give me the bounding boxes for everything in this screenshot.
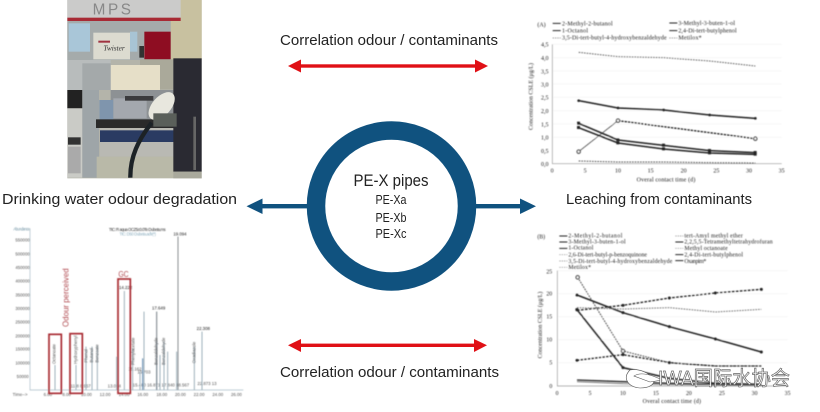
photo: lab instrument: Twister xyxy=(103,44,125,53)
chart: GC chromatogram: 18.00 xyxy=(156,392,168,397)
chart A: leaching concentrations: 4,5 xyxy=(541,43,548,49)
photo: lab instrument: MPS xyxy=(93,2,131,19)
chart: GC chromatogram: Butanol xyxy=(89,348,94,363)
chart A: leaching concentrations xyxy=(528,21,785,183)
chart: GC chromatogram: 50000 xyxy=(17,374,29,379)
chart B: overall contact time concentrations: 3,5-Di-tert-butyl-4-hydroxybenzaldehyde xyxy=(568,259,673,265)
chart: GC chromatogram: 20.00 xyxy=(175,392,186,397)
chart B: overall contact time concentrations xyxy=(537,233,791,405)
chart A: leaching concentrations: (A) xyxy=(537,22,546,29)
chart A: leaching concentrations: 1,0 xyxy=(541,136,548,142)
chart: GC chromatogram: 450000 xyxy=(15,265,30,270)
chart: GC chromatogram: 22.308 xyxy=(197,326,210,331)
label: drinking water odour degradation: Drinking water odour degradation xyxy=(2,192,237,208)
chart A: leaching concentrations: 4,0 xyxy=(541,56,548,62)
chart B: overall contact time concentrations: 2,2,5,5-Tetramethyltetrahydrofuran xyxy=(684,238,773,245)
chart B: overall contact time concentrations: 3-Methyl-3-buten-1-ol xyxy=(568,240,626,246)
chart: GC chromatogram: Odour perceived xyxy=(61,268,71,327)
chart: GC chromatogram xyxy=(13,226,243,397)
chart B: overall contact time concentrations: Methyl octanoate xyxy=(684,246,728,252)
chart: GC chromatogram: 6.00 xyxy=(44,392,53,397)
chart: GC chromatogram: 500000 xyxy=(15,251,30,256)
chart B: overall contact time concentrations: 30 xyxy=(752,391,758,397)
chart: GC chromatogram: Benzaldehyde xyxy=(154,337,159,365)
chart: GC chromatogram: 10.00 xyxy=(81,392,92,397)
chart A: leaching concentrations: Overal contact time (d) xyxy=(637,176,695,183)
text: PE-Xa: PE-Xa xyxy=(376,193,407,207)
chart A: leaching concentrations: 20 xyxy=(681,169,687,175)
chart: GC chromatogram: Time--> xyxy=(13,392,28,397)
chart: GC chromatogram: 14.00 xyxy=(119,392,130,397)
chart A: leaching concentrations: Concentration CSLE (μg/L) xyxy=(528,63,535,130)
icon: watermark logo xyxy=(626,370,662,388)
chart: GC chromatogram: TIC: R aqua OCZ5c0.0Te Dubeta.ms xyxy=(109,227,166,232)
chart A: leaching concentrations: 1,5 xyxy=(541,122,548,128)
chart: GC chromatogram: Phenylacetate xyxy=(130,337,135,365)
heading: correlation top: Correlation odour / contaminants xyxy=(280,33,498,49)
chart: GC chromatogram: Phenol xyxy=(83,349,88,363)
chart B: overall contact time concentrations: 2,4-Di-tert-butylphenol xyxy=(684,252,743,258)
text: PE-Xb: PE-Xb xyxy=(376,211,407,225)
chart B: overall contact time concentrations: tert-Amyl methyl ether xyxy=(684,233,743,239)
chart A: leaching concentrations: 3,5-Di-tert-butyl-4-hydroxybenzaldehyde xyxy=(562,36,667,42)
chart A: leaching concentrations: 25 xyxy=(713,169,719,175)
chart B: overall contact time concentrations: 20 xyxy=(686,391,692,397)
chart A: leaching concentrations: Metilox* xyxy=(678,36,702,42)
chart: GC chromatogram: 11.8 8.957 xyxy=(71,384,91,389)
chart B: overall contact time concentrations: 10 xyxy=(546,338,552,344)
chart B: overall contact time concentrations: 0 xyxy=(556,391,559,397)
chart A: leaching concentrations: 15 xyxy=(648,169,654,175)
chart B: overall contact time concentrations: 0 xyxy=(549,384,552,390)
chart: GC chromatogram: Abundance xyxy=(13,226,31,231)
chart: GC chromatogram: 19.094 xyxy=(173,232,187,237)
chart: GC chromatogram: 12.00 xyxy=(100,392,111,397)
chart: GC chromatogram: Hydroxyphenyl xyxy=(73,335,78,364)
chart B: overall contact time concentrations: 25 xyxy=(719,391,725,397)
chart: GC chromatogram: 8.00 xyxy=(62,392,71,397)
photo: lab instrument xyxy=(67,0,202,178)
chart A: leaching concentrations: 30 xyxy=(746,169,752,175)
chart B: overall contact time concentrations: 5 xyxy=(589,391,592,397)
chart B: overall contact time concentrations: 20 xyxy=(546,292,552,298)
chart A: leaching concentrations: 0,0 xyxy=(541,162,548,168)
chart: GC chromatogram: 15.480 16.871 17.840 18.567 xyxy=(133,383,190,388)
arrow: red double arrow top xyxy=(288,60,488,72)
chart: GC chromatogram: 550000 xyxy=(15,238,30,243)
chart: GC chromatogram: 14.222 xyxy=(119,285,133,290)
chart B: overall contact time concentrations: Oxanpim* xyxy=(684,259,706,265)
arrow: blue right xyxy=(476,198,536,214)
chart: GC chromatogram: 150000 xyxy=(15,347,30,352)
chart A: leaching concentrations: 3-Methyl-3-buten-1-ol xyxy=(678,21,735,27)
diagram: PE-X pipe ring xyxy=(316,130,467,282)
chart A: leaching concentrations: 0,5 xyxy=(541,149,548,155)
chart: GC chromatogram: 16.00 xyxy=(137,392,149,397)
chart: GC chromatogram: 22.00 xyxy=(194,392,205,397)
chart A: leaching concentrations: 0 xyxy=(551,169,554,175)
arrow: red double arrow bottom xyxy=(288,339,487,352)
chart: GC chromatogram: 15.703 xyxy=(137,370,151,375)
chart A: leaching concentrations: 5 xyxy=(584,169,587,175)
heading: correlation bottom: Correlation odour / contaminants xyxy=(280,365,499,381)
chart: GC chromatogram: Oxadiazole xyxy=(191,341,196,363)
chart A: leaching concentrations: 2,5 xyxy=(541,96,548,102)
chart B: overall contact time concentrations: Metilox* xyxy=(568,265,591,271)
chart: GC chromatogram: 17.649 xyxy=(152,305,166,310)
arrow: blue left xyxy=(246,198,308,214)
chart A: leaching concentrations: 2,4-Di-tert-butylphenol xyxy=(678,28,737,34)
chart: GC chromatogram: Benzoate xyxy=(94,344,99,363)
chart: GC chromatogram: TIC: D50 Dubeta.ad\r(*) xyxy=(119,232,157,237)
chart B: overall contact time concentrations: (B) xyxy=(537,234,545,241)
chart: GC chromatogram: 22.873 13 xyxy=(197,381,217,386)
chart: GC chromatogram: GC xyxy=(118,269,129,279)
chart: GC chromatogram: 26.00 xyxy=(231,392,242,397)
chart B: overall contact time concentrations: 35 xyxy=(785,391,791,397)
chart: GC chromatogram: 400000 xyxy=(15,279,30,284)
chart: GC chromatogram: 200000 xyxy=(15,333,30,338)
text: PE-Xc: PE-Xc xyxy=(376,227,406,241)
chart A: leaching concentrations: 2,0 xyxy=(541,109,548,115)
chart B: overall contact time concentrations: 1-Octanol xyxy=(568,246,594,252)
text: watermark: IWA国际水协会 xyxy=(658,367,790,390)
chart: GC chromatogram: 15.162 xyxy=(128,366,142,371)
text: PE-X pipes: PE-X pipes xyxy=(354,172,428,190)
chart: GC chromatogram: Octanoate xyxy=(52,343,57,364)
chart B: overall contact time concentrations: 15 xyxy=(546,315,552,321)
chart B: overall contact time concentrations: Overal contact time (d) xyxy=(643,398,701,405)
chart B: overall contact time concentrations: 5 xyxy=(549,361,552,367)
chart B: overall contact time concentrations: 2-Methyl-2-butanol xyxy=(568,233,623,239)
chart: GC chromatogram: 350000 xyxy=(15,292,30,297)
label: leaching from contaminants: Leaching from contaminants xyxy=(566,192,752,208)
chart A: leaching concentrations: 2-Methyl-2-butanol xyxy=(562,22,613,28)
chart A: leaching concentrations: 3,5 xyxy=(541,69,548,75)
chart: GC chromatogram: Benzaldehyde xyxy=(161,337,166,365)
chart: GC chromatogram: 100000 xyxy=(15,360,30,365)
chart B: overall contact time concentrations: 25 xyxy=(546,269,552,275)
chart A: leaching concentrations: 1-Octanol xyxy=(562,28,588,34)
chart A: leaching concentrations: 10 xyxy=(615,169,621,175)
chart: GC chromatogram: 24.00 xyxy=(212,392,224,397)
watermark: IWA logo and name xyxy=(626,367,790,390)
chart A: leaching concentrations: 3,0 xyxy=(541,82,548,88)
chart B: overall contact time concentrations: 10 xyxy=(620,391,626,397)
chart: GC chromatogram: 300000 xyxy=(15,306,30,311)
chart B: overall contact time concentrations: 15 xyxy=(653,391,659,397)
chart B: overall contact time concentrations: 2,6-Di-tert-butyl-p-benzoquinone xyxy=(568,252,647,258)
chart: GC chromatogram: 250000 xyxy=(15,320,30,325)
chart A: leaching concentrations: 35 xyxy=(779,169,785,175)
chart B: overall contact time concentrations: Concentration CSLE (μg/L) xyxy=(537,292,544,358)
chart: GC chromatogram: 13.094 xyxy=(108,384,121,389)
